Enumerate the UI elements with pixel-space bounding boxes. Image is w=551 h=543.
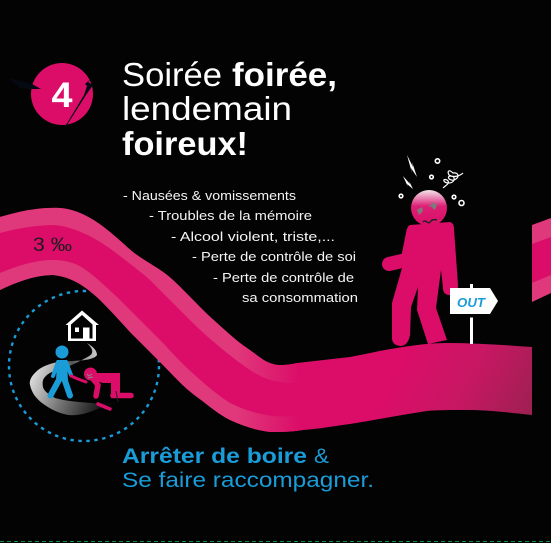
signpost: OUT xyxy=(457,296,486,310)
title: lendemain xyxy=(122,90,292,127)
pink wave band xyxy=(0,208,532,432)
advice text: Se faire raccompagner. xyxy=(122,469,374,492)
advice text: Arrêter de boire xyxy=(122,445,307,468)
title: foirée, xyxy=(232,56,337,93)
title: Soirée xyxy=(122,56,222,93)
symptom list: - Alcool violent, triste,... xyxy=(171,229,335,244)
symptom list xyxy=(123,188,358,305)
bottle xyxy=(98,404,110,409)
advice text xyxy=(122,445,374,492)
symptom list: sa consommation xyxy=(242,290,358,305)
lightning bolts xyxy=(407,155,417,177)
badge shard left xyxy=(9,78,41,89)
title xyxy=(122,56,337,162)
signpost xyxy=(450,284,498,344)
figure: pink crawling person xyxy=(71,368,131,409)
dashed circle xyxy=(9,291,159,441)
bubbles xyxy=(399,159,464,206)
icon: house xyxy=(66,310,99,341)
figure: dizzy pink man xyxy=(389,155,464,346)
symptom list: - Nausées & vomissements xyxy=(123,188,297,203)
spiral xyxy=(443,171,463,188)
badge shard right xyxy=(66,75,95,125)
body silhouette xyxy=(392,222,458,346)
advice text: & xyxy=(314,445,329,468)
number badge xyxy=(9,63,95,125)
symptom list: - Perte de contrôle de soi xyxy=(192,249,356,264)
title: foireux! xyxy=(122,125,248,162)
upper light stripe xyxy=(0,208,297,383)
figure: blue person xyxy=(50,346,71,396)
symptom list: - Perte de contrôle de xyxy=(213,270,354,285)
head xyxy=(411,190,447,226)
winding road xyxy=(30,343,116,415)
number 4: 4 xyxy=(52,76,73,115)
symptom list: - Troubles de la mémoire xyxy=(149,208,312,223)
right band fragment xyxy=(532,218,551,302)
lower light stripe xyxy=(0,260,303,432)
left arm xyxy=(389,260,406,264)
blood alcohol label: 3 ‰ xyxy=(33,235,72,256)
